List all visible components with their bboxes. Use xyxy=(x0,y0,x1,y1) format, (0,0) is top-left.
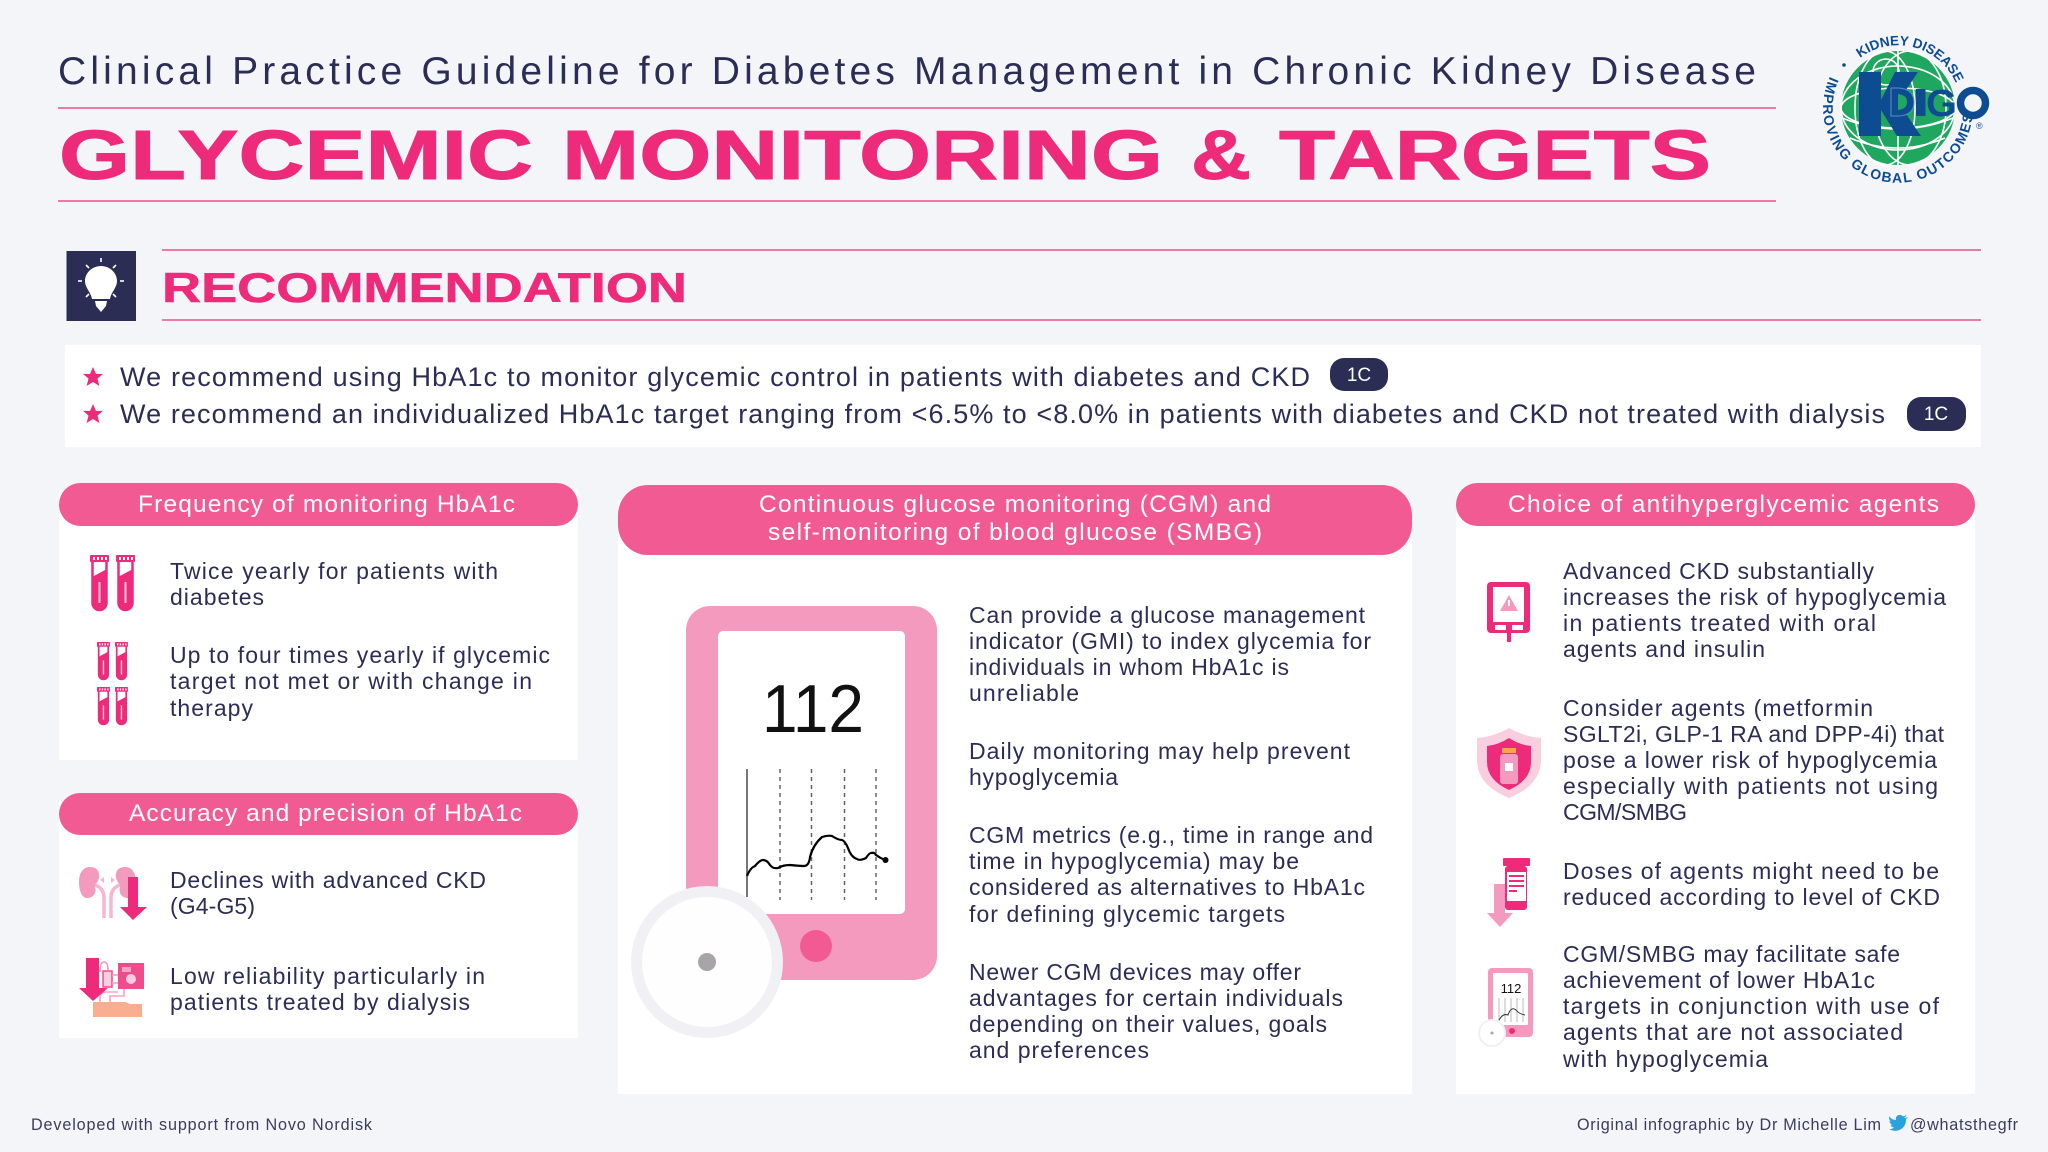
text: GMI: unreliable xyxy=(969,680,1079,706)
text: consider agents: SGLT2i, GLP-1 RA and DPP-4i) that xyxy=(1563,721,1945,747)
icon: pill bottle with down arrow xyxy=(1487,858,1530,927)
text: GMI xyxy=(969,602,1371,706)
text: CGM metrics xyxy=(969,822,1373,927)
grade pill 1C xyxy=(1330,358,1388,391)
text: consider agents xyxy=(1563,695,1945,825)
text: twice yearly: Twice yearly for patients with xyxy=(170,558,498,584)
icon: lightbulb xyxy=(66,251,136,321)
panel header xyxy=(59,483,578,526)
heading: recommendation: RECOMMENDATION xyxy=(162,264,687,311)
text: up to four times xyxy=(170,642,550,721)
recommendation 2: We recommend an individualized HbA1c target ranging from <6.5% to <8.0% in patients with diabetes and CKD not treated with dialysis xyxy=(120,399,1885,429)
panel header xyxy=(1456,483,1975,526)
icon: glucometer with warning xyxy=(1487,582,1530,642)
text: daily monitoring: hypoglycemia xyxy=(969,764,1118,790)
icon: small glucose monitor: 112 xyxy=(1501,981,1521,996)
icon: shield with medicine bottle xyxy=(1477,728,1541,798)
text: up to four times: therapy xyxy=(170,695,254,721)
icon: four test tubes xyxy=(97,642,128,725)
grade pill 1C xyxy=(1907,397,1966,431)
text: low reliability xyxy=(170,963,485,1015)
text: CGM metrics: time in hypoglycemia) may be xyxy=(969,848,1299,874)
text: consider agents: especially with patients not using xyxy=(1563,773,1938,799)
text: twice yearly xyxy=(170,558,498,610)
text: CGM/SMBG may facilitate xyxy=(1562,941,1940,1072)
text: up to four times: target not met or with change in xyxy=(170,668,532,694)
panel header: self-monitoring of blood glucose (SMBG) xyxy=(768,519,1262,546)
text: GMI: indicator (GMI) to index glycemia for xyxy=(969,628,1371,654)
panel: accuracy and precision of HbA1c xyxy=(59,793,578,1038)
text: CGM/SMBG may facilitate: targets in conjunction with use of xyxy=(1563,993,1940,1019)
illustration: glucose monitor with sensor xyxy=(631,606,937,1038)
icon: small glucose monitor xyxy=(1479,968,1533,1046)
panel header: Continuous glucose monitoring (CGM) and xyxy=(759,491,1271,518)
icon: star xyxy=(83,367,103,386)
illustration: glucose monitor with sensor: 112 xyxy=(762,671,864,747)
text: low reliability: patients treated by dialysis xyxy=(170,989,470,1015)
text: daily monitoring: Daily monitoring may help prevent xyxy=(969,738,1351,764)
text: GMI: Can provide a glucose management xyxy=(969,602,1366,628)
footer: author credit: Original infographic by Dr Michelle Lim xyxy=(1577,1116,1881,1134)
text: CGM metrics: considered as alternatives to HbA1c xyxy=(969,874,1365,900)
text: newer CGM devices: Newer CGM devices may offer xyxy=(969,959,1301,985)
recommendation 1: We recommend using HbA1c to monitor glycemic control in patients with diabetes and CKD xyxy=(120,362,1310,392)
text: CGM/SMBG may facilitate: agents that are not associated xyxy=(1563,1019,1903,1045)
text: low reliability: Low reliability particularly in xyxy=(170,963,485,989)
footer: twitter handle: @whatsthegfr xyxy=(1910,1116,2019,1134)
text: declines with advanced CKD: (G4-G5) xyxy=(170,893,255,919)
heading: glycemic monitoring and targets: MONITORING xyxy=(562,116,1163,194)
panel: recommendations xyxy=(65,345,1981,447)
text: newer CGM devices: and preferences xyxy=(969,1037,1149,1063)
text: consider agents: pose a lower risk of hypoglycemia xyxy=(1563,747,1937,773)
grade pill 1C: 1C xyxy=(1347,365,1371,386)
text: newer CGM devices xyxy=(969,959,1343,1063)
panel: CGM and SMBG xyxy=(618,485,1412,1094)
text: GMI: individuals in whom HbA1c is xyxy=(969,654,1289,680)
text: doses: Doses of agents might need to be xyxy=(1563,858,1939,884)
text: consider agents: CGM/SMBG xyxy=(1563,799,1687,825)
text: declines with advanced CKD: Declines with advanced CKD xyxy=(170,867,486,893)
logo: KDIGO: IMPROVING GLOBAL OUTCOMES xyxy=(1823,77,1972,183)
text: advanced CKD: agents and insulin xyxy=(1563,636,1765,662)
heading: glycemic monitoring and targets: & xyxy=(1191,116,1251,194)
text: CGM/SMBG may facilitate: CGM/SMBG may facilitate safe xyxy=(1563,941,1900,967)
text: doses: reduced according to level of CKD xyxy=(1563,884,1940,910)
text: up to four times: Up to four times yearly if glycemic xyxy=(170,642,550,668)
logo: KDIGO: KIDNEY DISEASE xyxy=(1856,36,1964,83)
footer: support credit: Developed with support from Novo Nordisk xyxy=(31,1116,373,1134)
text: daily monitoring xyxy=(969,738,1351,790)
logo: KDIGO xyxy=(1823,36,1990,183)
icon: star xyxy=(83,404,103,423)
heading: glycemic monitoring and targets: GLYCEMIC xyxy=(59,116,533,194)
grade pill 1C: 1C xyxy=(1924,404,1948,425)
text: advanced CKD: Advanced CKD substantially xyxy=(1563,558,1874,584)
heading: glycemic monitoring and targets: TARGETS xyxy=(1279,116,1711,194)
panel header xyxy=(59,793,578,835)
text: newer CGM devices: advantages for certain individuals xyxy=(969,985,1343,1011)
text: CGM metrics: for defining glycemic targets xyxy=(969,901,1285,927)
text: CGM metrics: CGM metrics (e.g., time in range and xyxy=(969,822,1373,848)
text: consider agents: Consider agents (metformin xyxy=(1563,695,1873,721)
icon: dialysis with down arrow xyxy=(79,958,144,1017)
logo: KDIGO: G xyxy=(1926,83,1957,125)
icon: kidneys with down arrow xyxy=(79,867,147,920)
panel header: Frequency of monitoring HbA1c xyxy=(138,491,515,518)
panel: choice of antihyperglycemic agents xyxy=(1456,483,1975,1094)
text: twice yearly: diabetes xyxy=(170,584,264,610)
panel: frequency of monitoring HbA1c xyxy=(59,483,578,760)
text: advanced CKD: in patients treated with oral xyxy=(1563,610,1876,636)
text: doses xyxy=(1563,858,1940,910)
logo: KDIGO: ® xyxy=(1976,121,1983,131)
text: CGM/SMBG may facilitate: achievement of lower HbA1c xyxy=(1563,967,1875,993)
icon: two test tubes xyxy=(90,555,135,611)
heading: glycemic monitoring and targets xyxy=(59,116,1711,194)
panel header: Choice of antihyperglycemic agents xyxy=(1508,491,1939,518)
icon: twitter bird xyxy=(1889,1115,1908,1131)
panel header xyxy=(618,485,1412,555)
text: advanced CKD xyxy=(1563,558,1946,662)
text: newer CGM devices: depending on their values, goals xyxy=(969,1011,1327,1037)
text: declines with advanced CKD xyxy=(170,867,486,919)
panel header: Accuracy and precision of HbA1c xyxy=(129,800,522,827)
text: CGM/SMBG may facilitate: with hypoglycemia xyxy=(1562,1046,1768,1072)
text: advanced CKD: increases the risk of hypoglycemia xyxy=(1563,584,1946,610)
title: guideline name: Clinical Practice Guideline for Diabetes Management in Chronic Kidney Disease xyxy=(58,50,1756,93)
